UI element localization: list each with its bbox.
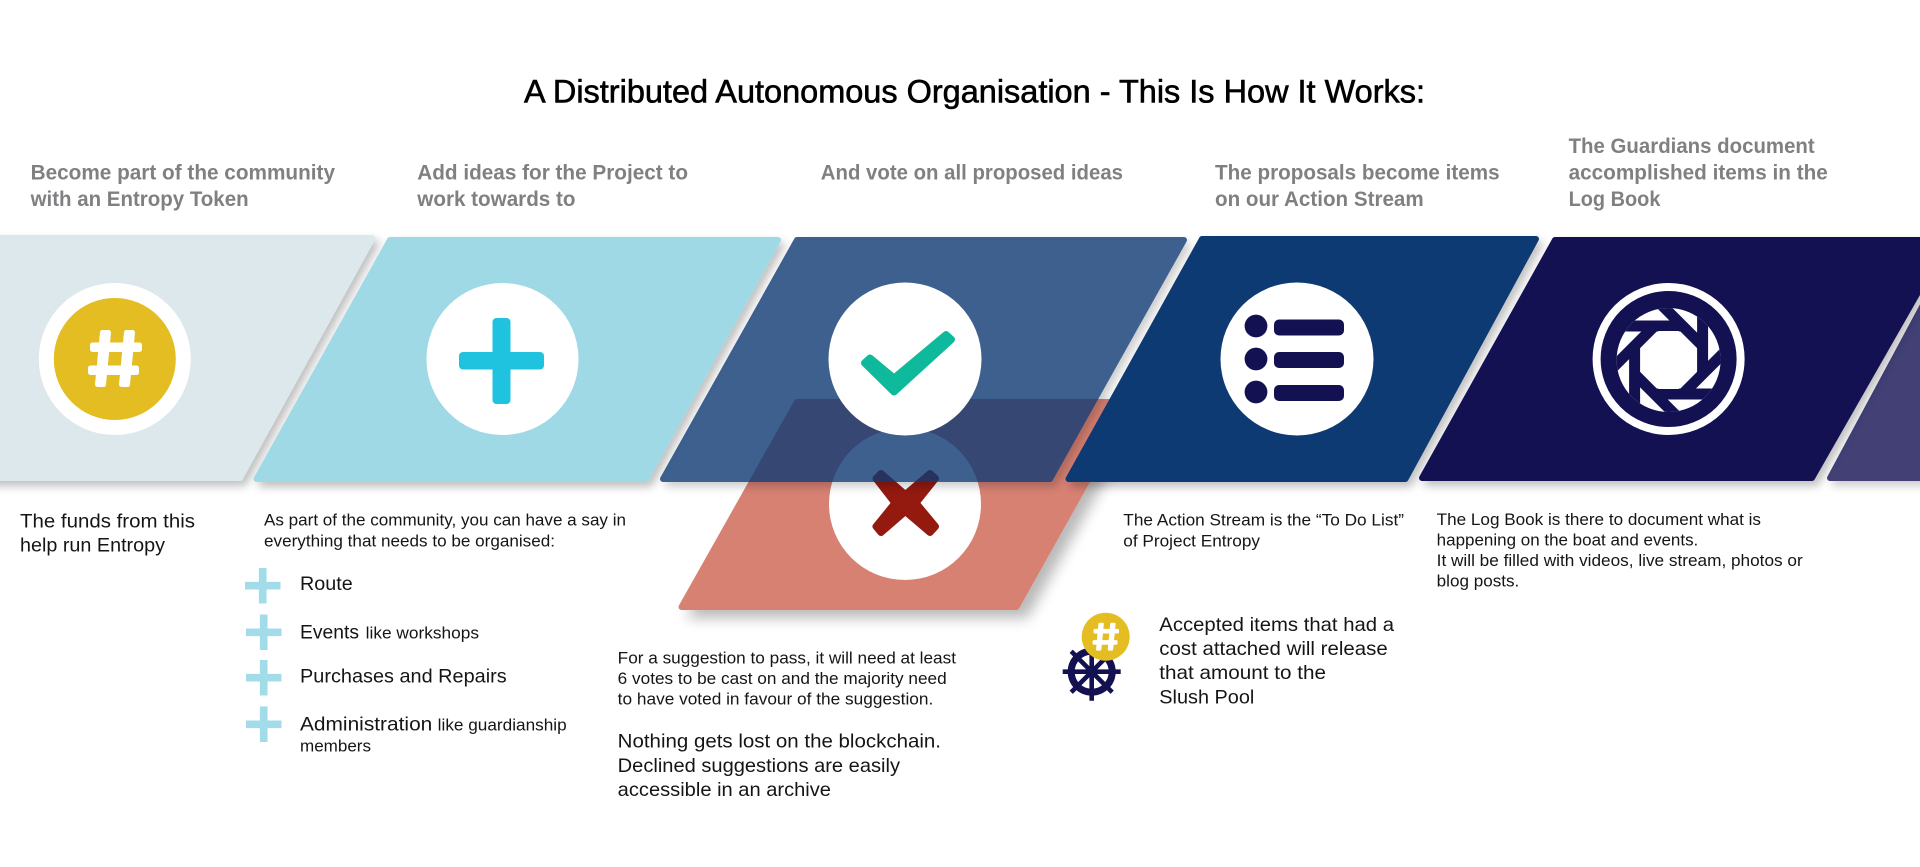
list item: administration: like guardianship bbox=[438, 717, 567, 735]
text: slush pool: cost attached will release bbox=[1159, 638, 1388, 660]
text: archive note bbox=[618, 731, 941, 801]
list item: purchases: Purchases and Repairs bbox=[300, 666, 507, 688]
text: slush pool: Accepted items that had a bbox=[1159, 614, 1394, 636]
list item: events: like workshops bbox=[366, 624, 479, 642]
text: pass rule: For a suggestion to pass, it will need at least bbox=[618, 649, 956, 667]
heading: step 5: The Guardians document bbox=[1569, 134, 1815, 158]
text: pass rule: to have voted in favour of the suggestion. bbox=[618, 690, 933, 708]
list item: route bbox=[245, 568, 353, 604]
text: community say: As part of the community, you can have a say in bbox=[264, 512, 626, 530]
heading: step 4 bbox=[1215, 160, 1500, 211]
icon: helm and token bbox=[1063, 613, 1130, 701]
heading: step 5: Log Book bbox=[1569, 187, 1660, 211]
heading: step 5 bbox=[1569, 134, 1828, 211]
title: A Distributed Autonomous Organisation - This Is How It Works: bbox=[524, 74, 1425, 110]
list item: administration: Administration bbox=[300, 714, 432, 736]
icon: hash bbox=[90, 332, 140, 384]
text: action stream: of Project Entropy bbox=[1123, 533, 1261, 551]
text: action stream bbox=[1123, 512, 1404, 551]
icon: hash small bbox=[1094, 624, 1118, 649]
text: slush pool: Slush Pool bbox=[1159, 686, 1254, 708]
heading: step 1: Become part of the community bbox=[31, 160, 335, 184]
icon: list bbox=[1245, 315, 1344, 403]
panel: accepted vote bbox=[663, 240, 1184, 479]
panel: next step (cropped) bbox=[1830, 240, 1920, 478]
panel: declined vote bbox=[682, 402, 1132, 607]
icon: plus bbox=[459, 318, 544, 404]
icon: aperture bbox=[1597, 287, 1741, 432]
text: action stream: The Action Stream is the “To Do List” bbox=[1123, 512, 1404, 530]
icon: check bbox=[864, 334, 952, 392]
panel: add ideas bbox=[256, 240, 778, 479]
text: log book: It will be filled with videos, live stream, photos or bbox=[1437, 552, 1803, 570]
text: funds: The funds from this bbox=[20, 510, 195, 532]
list item: purchases bbox=[246, 660, 507, 696]
text: funds: help run Entropy bbox=[20, 535, 165, 557]
text: archive note: Nothing gets lost on the blockchain. bbox=[618, 731, 941, 753]
heading: step 2: work towards to bbox=[416, 187, 576, 211]
icon: ship wheel bbox=[1063, 643, 1121, 701]
list item: administration bbox=[246, 706, 567, 756]
text: pass rule bbox=[618, 649, 956, 708]
list item: route: Route bbox=[300, 573, 353, 595]
heading: step 4: The proposals become items bbox=[1215, 160, 1500, 184]
list item: events: Events bbox=[300, 621, 359, 643]
text: community say: everything that needs to be organised: bbox=[264, 533, 555, 551]
text: community say bbox=[264, 512, 626, 551]
text: slush pool bbox=[1159, 614, 1394, 708]
heading: step 2: Add ideas for the Project to bbox=[417, 160, 688, 184]
text: log book: happening on the boat and events. bbox=[1437, 531, 1698, 549]
list item: administration: members bbox=[300, 738, 371, 756]
text: archive note: Declined suggestions are easily bbox=[618, 755, 900, 777]
heading: step 5: accomplished items in the bbox=[1569, 160, 1828, 184]
heading: step 1: with an Entropy Token bbox=[30, 187, 249, 211]
list: organised items bbox=[245, 568, 567, 756]
text: funds bbox=[20, 510, 195, 557]
panel: log book bbox=[1422, 240, 1920, 478]
text: log book: The Log Book is there to document what is bbox=[1437, 511, 1761, 529]
icon: cross bbox=[876, 474, 936, 532]
text: slush pool: that amount to the bbox=[1159, 662, 1326, 684]
panel: entropy token bbox=[0, 238, 372, 478]
list item: events bbox=[246, 614, 479, 650]
text: log book: blog posts. bbox=[1437, 573, 1519, 591]
heading: step 2 bbox=[416, 160, 688, 211]
panel: action stream bbox=[1068, 239, 1536, 479]
text: pass rule: 6 votes to be cast on and the majority need bbox=[618, 670, 947, 688]
heading: step 4: on our Action Stream bbox=[1215, 187, 1424, 211]
heading: step 3: And vote on all proposed ideas bbox=[821, 160, 1123, 184]
text: archive note: accessible in an archive bbox=[618, 779, 831, 801]
text: log book bbox=[1437, 511, 1803, 591]
heading: step 1 bbox=[30, 160, 335, 211]
